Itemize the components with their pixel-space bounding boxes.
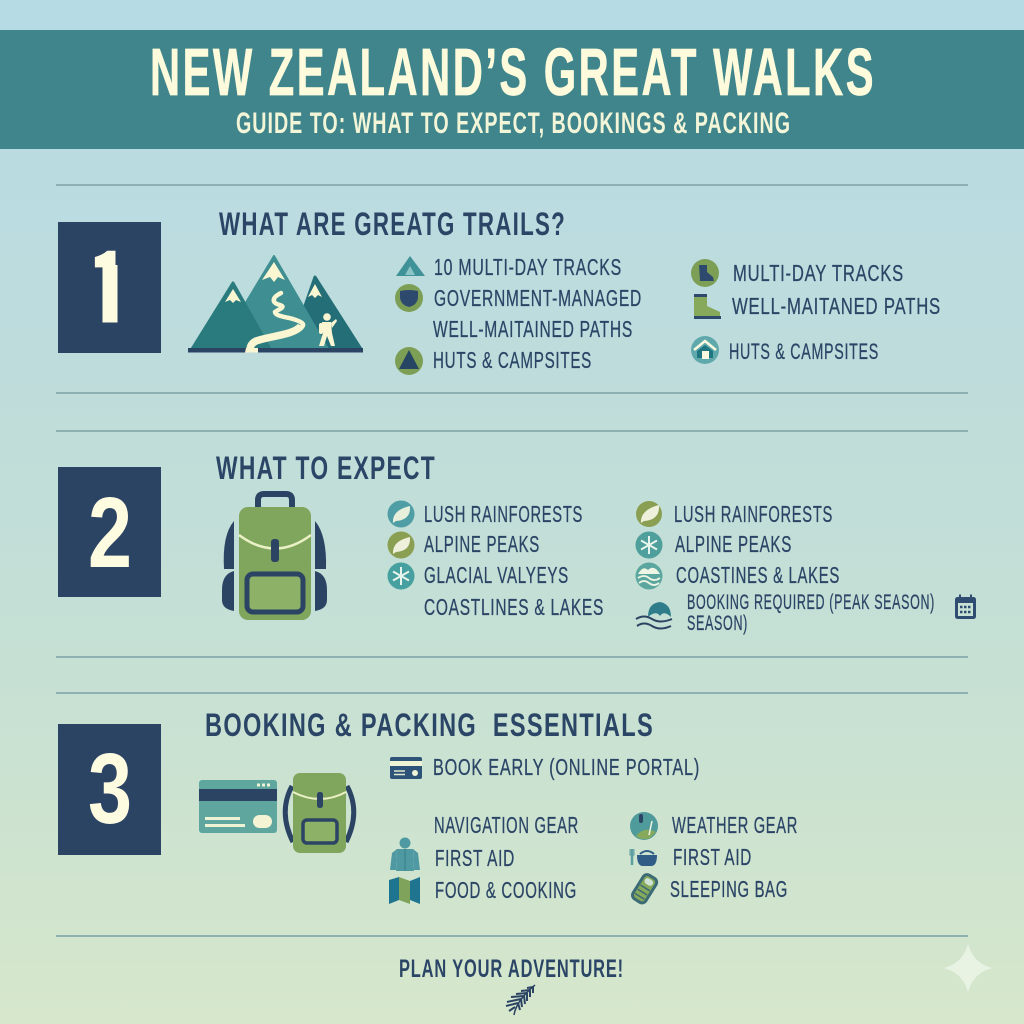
text: multi-day tracks: MULTI-DAY TRACKS — [733, 260, 904, 286]
heading: what are great trails: WHAT ARE GREATG TRAILS? — [219, 206, 566, 242]
icon: mountains with trail and hiker — [188, 256, 363, 352]
icon: payment card — [390, 757, 422, 779]
number badge 2 — [58, 467, 161, 597]
icon: campsite — [395, 347, 423, 375]
footer call to action: PLAN YOUR ADVENTURE! — [399, 955, 624, 983]
panel: section 2, what to expect — [58, 450, 976, 635]
text: huts and campsites: HUTS & CAMPSITES — [433, 347, 592, 373]
icon: leaf green — [388, 532, 414, 558]
panel: section 3, booking and packing essentials — [58, 707, 798, 905]
text: glacial valleys: GLACIAL VALYEYS — [424, 562, 569, 588]
text: book early: BOOK EARLY (ONLINE PORTAL) — [433, 754, 700, 780]
text: first aid: FIRST AID — [435, 845, 515, 871]
text: season: SEASON) — [687, 612, 748, 635]
number badge 2: 2 — [88, 477, 132, 589]
text: alpine peaks: ALPINE PEAKS — [675, 531, 792, 557]
number badge 3 — [58, 724, 161, 855]
text: alpine peaks: ALPINE PEAKS — [424, 531, 540, 557]
text: food and cooking: FOOD & COOKING — [435, 877, 577, 903]
text: first aid: FIRST AID — [673, 844, 752, 870]
icon: rain jacket — [390, 838, 420, 871]
text: huts and campsites: HUTS & CAMPSITES — [729, 339, 879, 364]
number badge 1: 1 — [88, 209, 129, 351]
icon: silver fern — [506, 985, 535, 1015]
icon: hut — [691, 336, 719, 364]
heading: booking and packing essentials: BOOKING & PACKING ESSENTIALS — [205, 707, 654, 743]
icon: snowflake — [388, 562, 414, 590]
number badge 1 — [58, 209, 161, 353]
heading: what to expect: WHAT TO EXPECT — [216, 450, 436, 486]
icon: backpack — [222, 494, 327, 620]
text: well-maintained paths: WELL-MAITAINED PATHS — [433, 316, 633, 342]
icon: weather gear — [630, 812, 658, 840]
icon: fork and pot — [630, 849, 657, 866]
text: navigation gear: NAVIGATION GEAR — [434, 812, 579, 838]
icon: shield — [395, 284, 423, 312]
icon: coast — [636, 562, 662, 590]
header banner — [0, 30, 1024, 149]
text: lush rainforests: LUSH RAINFORESTS — [674, 501, 833, 527]
text: 10 multi-day tracks: 10 MULTI-DAY TRACKS — [434, 254, 622, 280]
panel: section 1, what are great trails — [58, 206, 941, 375]
text: coastlines and lakes: COASTINES & LAKES — [676, 562, 840, 588]
text: coastlines and lakes: COASTLINES & LAKES — [424, 594, 604, 620]
text: government-managed: GOVERNMENT-MANAGED — [434, 285, 642, 311]
icon: map — [389, 877, 420, 904]
text: weather gear: WEATHER GEAR — [672, 812, 798, 838]
icon: boot badge — [691, 259, 719, 287]
icon: small backpack — [285, 773, 354, 853]
text: sleeping bag: SLEEPING BAG — [670, 876, 788, 902]
text: lush rainforests: LUSH RAINFORESTS — [424, 501, 583, 527]
icon: credit card — [199, 780, 277, 833]
icon: wave — [636, 602, 672, 628]
icon: tent — [396, 256, 425, 276]
icon: snowflake — [636, 532, 662, 558]
decorative sparkle — [944, 944, 992, 992]
text: well-maintained paths: WELL-MAITANED PATHS — [732, 293, 941, 319]
icon: leaf teal — [388, 500, 414, 528]
icon: sleeping bag — [631, 873, 658, 905]
icon: calendar — [955, 594, 976, 619]
icon: hiking boot — [694, 294, 721, 319]
number badge 3: 3 — [88, 733, 132, 845]
icon: leaf green — [636, 501, 662, 527]
